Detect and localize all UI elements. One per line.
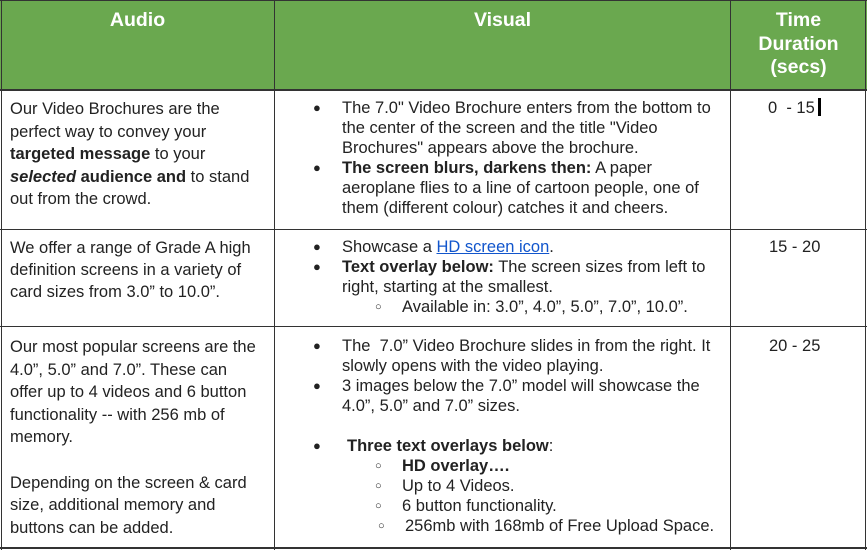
row 1 audio text: selected audience and to stand: [10, 168, 249, 186]
row 3 visual bullets: ○: [375, 480, 382, 492]
row 3 visual bullets: HD overlay….: [402, 457, 509, 475]
row 3 audio text: functionality -- with 256 mb of: [10, 406, 225, 424]
row 2 visual bullets: [313, 238, 705, 316]
row 1 audio text: out from the crowd.: [10, 190, 151, 208]
row 2 visual bullets: Text overlay below: The screen sizes from left to: [342, 258, 705, 276]
row 3 visual bullets: ○: [375, 500, 382, 512]
row 3 visual bullets: Up to 4 Videos.: [402, 477, 515, 495]
row 1 visual bullets: The 7.0" Video Brochure enters from the bottom to: [342, 99, 711, 117]
row 3 visual bullets: slowly opens with the video playing.: [342, 357, 603, 375]
header band: [0, 0, 867, 90]
row 3 visual bullets: ●: [313, 438, 321, 453]
row 1 visual bullets: the center of the screen and the title "Video: [342, 119, 658, 137]
row 2 audio text: We offer a range of Grade A high: [10, 239, 251, 257]
row 3 audio text: Depending on the screen & card: [10, 474, 247, 492]
header: Audio: Audio: [110, 9, 165, 31]
row 1 visual bullets: The screen blurs, darkens then: A paper: [342, 159, 652, 177]
row 2 time: 15 - 20: [769, 238, 820, 256]
row 2 audio text: definition screens in a variety of: [10, 261, 241, 279]
row 3 visual bullets: 6 button functionality.: [402, 497, 557, 515]
row 3 visual bullets: 4.0”, 5.0” and 7.0” sizes.: [342, 397, 520, 415]
row 3 visual bullets: ●: [313, 378, 321, 393]
row 3 visual bullets: Three text overlays below:: [347, 437, 553, 455]
row 3 visual bullets: 256mb with 168mb of Free Upload Space.: [405, 517, 714, 535]
row 1 audio text: perfect way to convey your: [10, 122, 206, 140]
header: Time Duration: Time: [776, 9, 821, 31]
row 3 audio text: offer up to 4 videos and 6 button: [10, 383, 246, 401]
row 3 audio text: size, additional memory and: [10, 496, 215, 514]
row 3 visual bullets: ●: [313, 338, 321, 353]
row 1 time: 0 - 15: [768, 99, 815, 117]
row 3 visual bullets: [313, 337, 714, 535]
row 2 visual bullets: Showcase a HD screen icon.: [342, 238, 554, 256]
row 1 audio text: Our Video Brochures are the: [10, 100, 220, 118]
row 1 audio text: [10, 100, 249, 208]
header: Time Duration: Duration: [758, 32, 839, 54]
row 3 audio text: memory.: [10, 428, 73, 446]
row 2 visual bullets: ●: [313, 239, 321, 254]
row 2 visual bullets: Available in: 3.0”, 4.0”, 5.0”, 7.0”, 10.0”.: [402, 298, 688, 316]
row 1 visual bullets: [313, 99, 711, 217]
row 3 audio text: 4.0”, 5.0” and 7.0”. These can: [10, 361, 227, 379]
row 2 audio text: [10, 239, 251, 301]
row 3 time: 20 - 25: [769, 337, 820, 355]
row 3 visual bullets: The 7.0” Video Brochure slides in from the right. It: [342, 337, 710, 355]
row 3 audio text: Our most popular screens are the: [10, 338, 256, 356]
row 3 audio text: buttons can be added.: [10, 519, 173, 537]
row 3 visual bullets: ○: [378, 520, 385, 532]
row 1 visual bullets: ●: [313, 160, 321, 175]
row 1 visual bullets: aeroplane flies to a line of cartoon people, one of: [342, 179, 699, 197]
header: Time Duration: (secs): [770, 56, 827, 78]
row 1 visual bullets: ●: [313, 100, 321, 115]
row 2 audio text: card sizes from 3.0” to 10.0”.: [10, 283, 220, 301]
row 3 visual bullets: ○: [375, 460, 382, 472]
row 2 visual bullets: ●: [313, 259, 321, 274]
row 2 visual bullets: right, starting at the smallest.: [342, 278, 553, 296]
row 1 visual bullets: them (different colour) catches it and cheers.: [342, 199, 668, 217]
header: Visual: Visual: [474, 9, 531, 31]
row 1 visual bullets: Brochures" appears above the brochure.: [342, 139, 639, 157]
row 2 visual bullets: ○: [375, 301, 382, 313]
header: Time Duration: [758, 9, 839, 78]
row 1 audio text: targeted message to your: [10, 145, 205, 163]
row 3 visual bullets: 3 images below the 7.0” model will showcase the: [342, 377, 700, 395]
row 3 audio text: [10, 338, 256, 537]
